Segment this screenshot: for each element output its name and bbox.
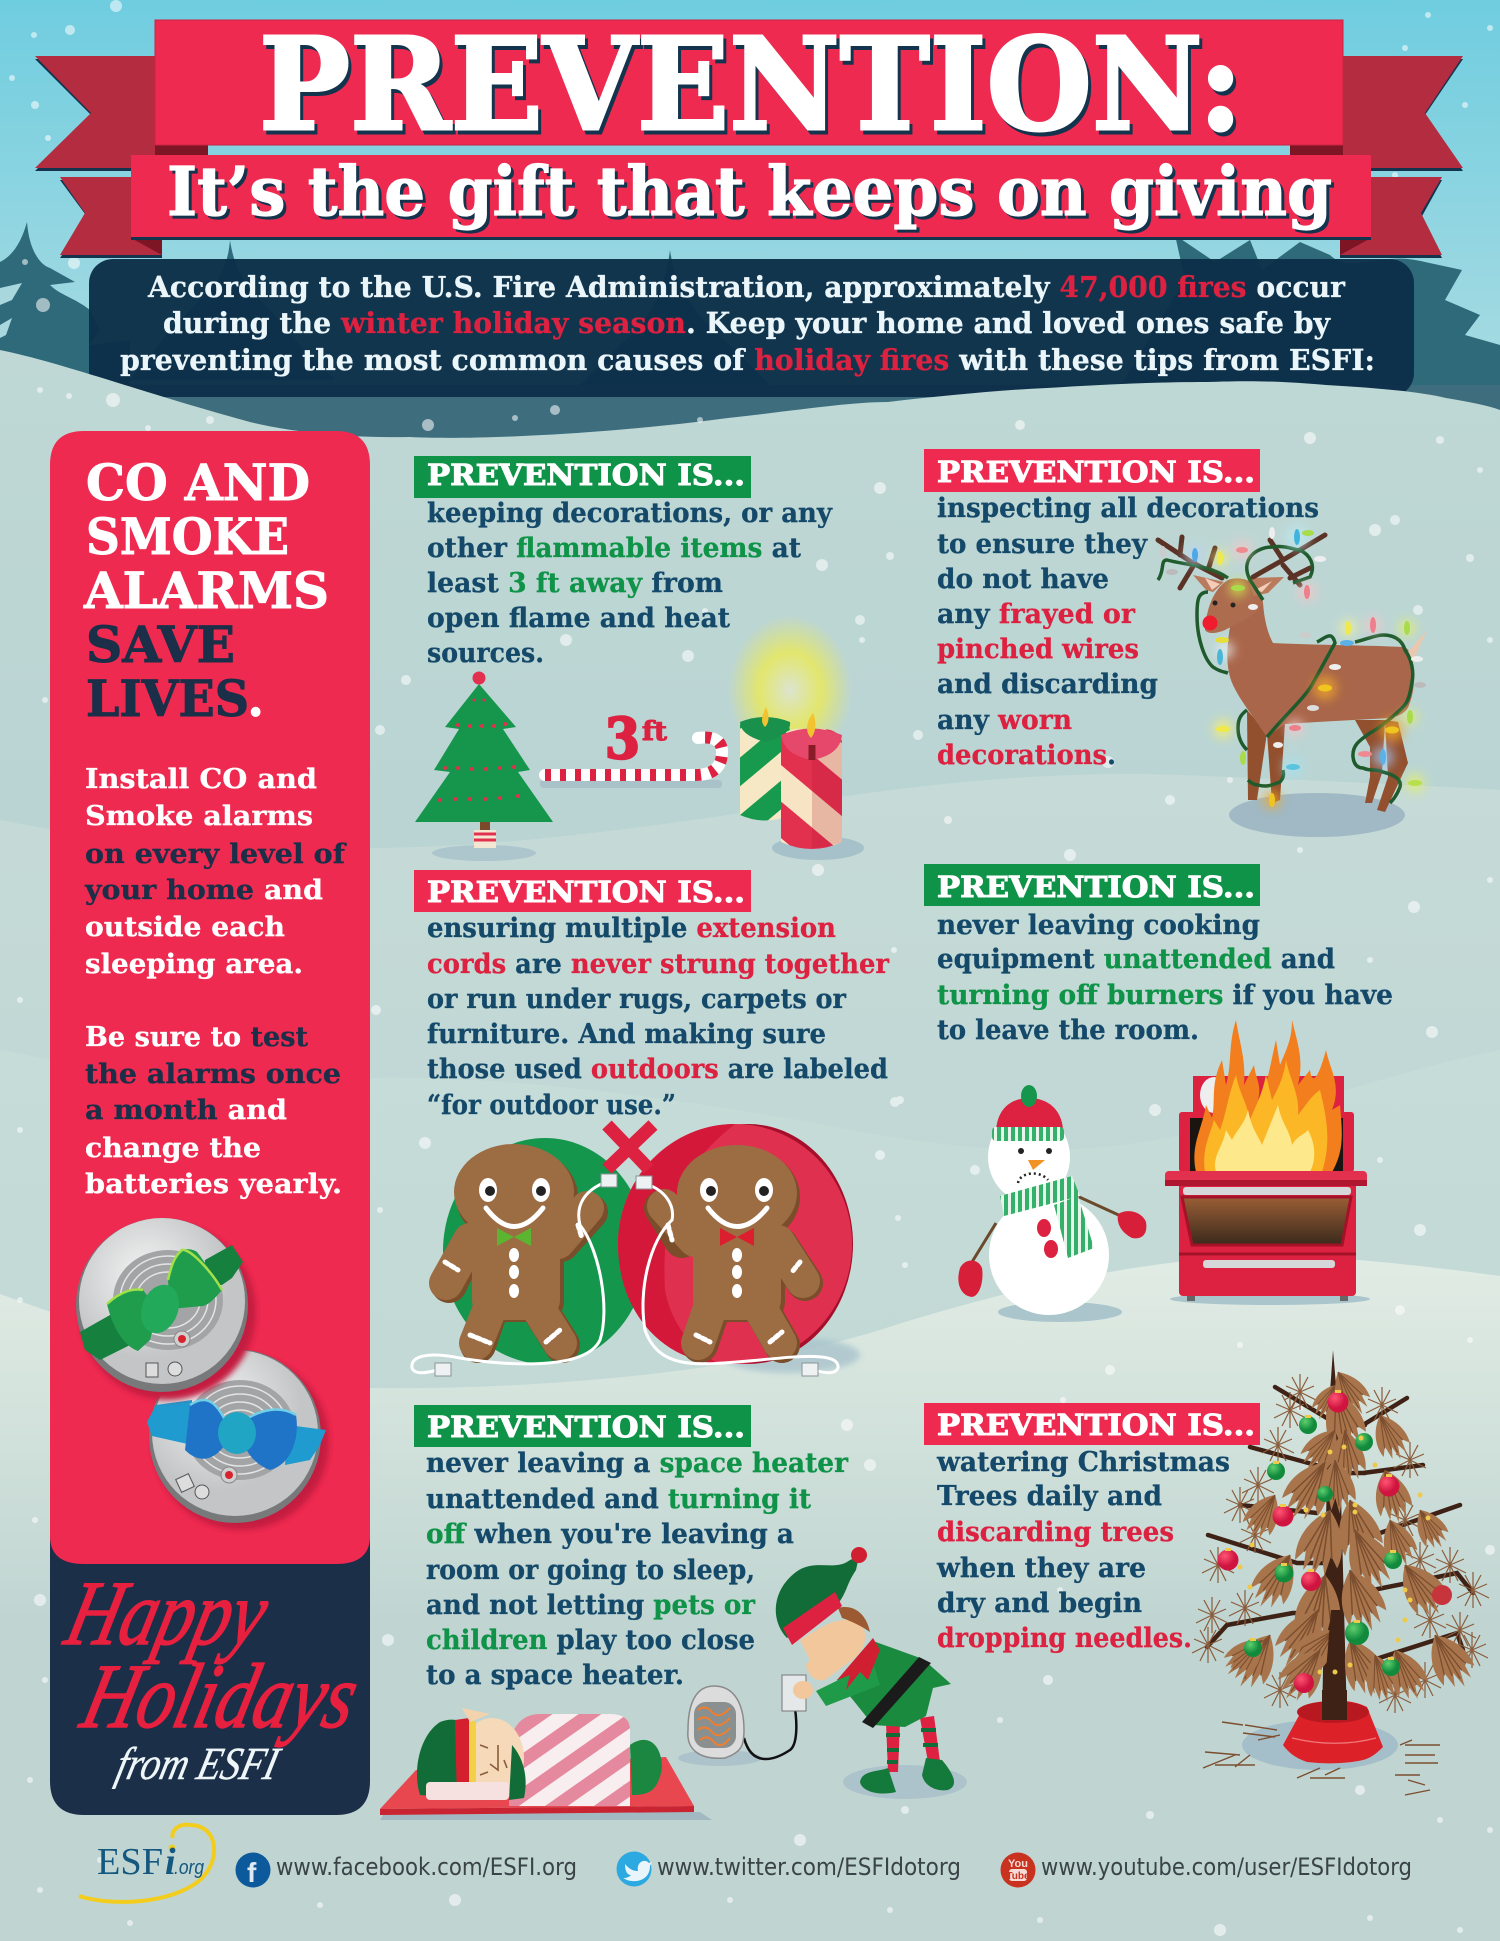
alarm heading xyxy=(83,453,329,728)
tip 2 label: PREVENTION IS... xyxy=(937,455,1255,489)
tip 1 text: keeping decorations, or any xyxy=(427,498,833,529)
tip 1 label: PREVENTION IS... xyxy=(427,458,745,492)
tip 2 text: any frayed or xyxy=(937,599,1136,630)
icon: smoke alarm with green bow xyxy=(76,1218,256,1400)
deer legs xyxy=(1247,710,1408,812)
icon: candy cane 3 ft: 3 xyxy=(605,706,640,772)
tip 5 text xyxy=(426,1448,849,1691)
tip 4 text xyxy=(937,910,1393,1046)
tip 6 text xyxy=(936,1447,1230,1654)
happy holidays greeting: Happy xyxy=(56,1563,279,1665)
gingerbread man left xyxy=(445,1144,590,1345)
tip 1: keep 3 ft away xyxy=(414,456,864,861)
icon: worried snowman xyxy=(958,1085,1146,1322)
alarm heading: LIVES. xyxy=(86,669,264,728)
alarm testing text: Be sure to test xyxy=(85,1022,309,1053)
alarm testing text: change the xyxy=(85,1133,261,1164)
twitter link: www.twitter.com/ESFIdotorg xyxy=(657,1853,961,1881)
alarm install text: outside each xyxy=(85,912,285,943)
youtube link xyxy=(1000,1852,1412,1888)
facebook link xyxy=(236,1852,577,1888)
tip 5 text: children play too close xyxy=(426,1625,755,1656)
intro panel xyxy=(89,259,1414,397)
red x xyxy=(607,1125,653,1169)
alarm install text: Smoke alarms xyxy=(85,801,313,832)
tip 3: extension cords xyxy=(412,870,890,1376)
icon: reindeer tangled in lights xyxy=(1158,525,1427,837)
tip 1 text xyxy=(427,498,833,669)
panel: CO and smoke alarms xyxy=(50,431,370,1815)
ornaments xyxy=(1218,1392,1452,1693)
ornament caps and lights xyxy=(1225,1390,1430,1674)
alarm install text: on every level of xyxy=(85,839,348,870)
sparse needle sprigs xyxy=(1192,1374,1489,1713)
extension cords xyxy=(412,1182,838,1373)
icon: stove on fire xyxy=(1165,1020,1370,1305)
tip 1 text: other flammable items at xyxy=(427,533,802,564)
tip 6 text: dropping needles. xyxy=(937,1623,1192,1654)
alarm testing text: a month and xyxy=(85,1095,287,1126)
tip 3 text: “for outdoor use.” xyxy=(427,1090,676,1121)
tip 3 text: ensuring multiple extension xyxy=(427,913,836,944)
banner: sub ribbon xyxy=(131,155,1371,240)
tip 4 text: never leaving cooking xyxy=(937,910,1260,941)
tip 2 text: decorations. xyxy=(937,740,1116,771)
pot xyxy=(1283,1701,1383,1763)
trunk and branches xyxy=(1322,1350,1347,1720)
alarm install text: sleeping area. xyxy=(85,949,303,980)
tip 2 text: any worn xyxy=(937,705,1072,736)
alarm install text: Install CO and xyxy=(85,764,317,795)
icon: standing elf xyxy=(776,1547,967,1799)
tip 4 text: turning off burners if you have xyxy=(937,980,1393,1011)
tip 2 text xyxy=(937,493,1319,771)
intro text: According to the U.S. Fire Administration, approximately 47,000 fires occur xyxy=(147,270,1346,304)
light cords xyxy=(1158,547,1413,803)
tip 2 text: do not have xyxy=(937,564,1109,595)
tip 1 text: open flame and heat xyxy=(427,603,731,634)
deer head xyxy=(1205,578,1263,633)
tip 2 text: to ensure they xyxy=(937,529,1148,560)
subtitle: It’s the gift that keeps on giving xyxy=(170,155,1335,234)
esfi logo: ESF xyxy=(97,1841,163,1883)
tip 3 text: cords are never strung together xyxy=(427,949,890,980)
youtube link: You xyxy=(1008,1858,1028,1870)
tip 5: space heater xyxy=(380,1405,967,1820)
tip 6 text: discarding trees xyxy=(937,1517,1174,1548)
tip 5 text: room or going to sleep, xyxy=(426,1555,755,1586)
title banner xyxy=(35,10,1463,258)
tip 4 text: to leave the room. xyxy=(937,1015,1199,1046)
intro text: during the winter holiday season. Keep your home and loved ones safe by xyxy=(163,306,1331,340)
banner: main ribbon xyxy=(155,20,1343,145)
alarm heading: ALARMS xyxy=(83,561,329,620)
tip 5 text: unattended and turning it xyxy=(426,1484,812,1515)
tip 2 text: inspecting all decorations xyxy=(937,493,1319,524)
happy holidays greeting: from ESFI xyxy=(111,1739,286,1790)
background: pine trees xyxy=(0,222,1500,460)
subtitle: It’s the gift that keeps on giving xyxy=(167,152,1332,231)
needle clusters xyxy=(1217,1364,1481,1710)
tip 3 label: PREVENTION IS... xyxy=(427,875,745,909)
tip 6: water trees xyxy=(924,1350,1489,1795)
deer body xyxy=(1227,600,1414,737)
alarm heading: SMOKE xyxy=(86,507,289,566)
icon: candy cane 3 ft: ft xyxy=(642,717,667,747)
tip 6 text: when they are xyxy=(936,1553,1146,1584)
alarm testing text: the alarms once xyxy=(85,1059,341,1090)
tip 6 text: dry and begin xyxy=(937,1588,1142,1619)
alarm install text: your home and xyxy=(84,875,323,906)
icon: smoke alarm with blue bow xyxy=(147,1349,329,1530)
tip 6 label: PREVENTION IS... xyxy=(937,1408,1255,1442)
tip 3 text: or run under rugs, carpets or xyxy=(427,984,847,1015)
facebook link: f xyxy=(247,1857,257,1888)
icon: christmas tree xyxy=(415,672,553,861)
intro text xyxy=(120,270,1375,377)
tip 4 text: equipment unattended and xyxy=(937,944,1335,975)
tip 3 text xyxy=(427,913,890,1121)
twitter link xyxy=(616,1852,961,1886)
bulb glows xyxy=(1185,525,1425,809)
tip 4 label: PREVENTION IS... xyxy=(937,870,1255,904)
tip 3 text: those used outdoors are labeled xyxy=(427,1054,888,1085)
esfi logo: .org xyxy=(174,1857,204,1879)
happy holidays greeting: Holidays xyxy=(72,1646,368,1748)
title: PREVENTION: PREVENTION: xyxy=(262,14,1246,163)
tip 6 text: watering Christmas xyxy=(936,1447,1230,1478)
alarm testing text: batteries yearly. xyxy=(85,1169,342,1200)
front trunk xyxy=(1322,1610,1347,1720)
icon: sleeping elf xyxy=(380,1708,712,1820)
icon: space heater and cord xyxy=(678,1675,806,1766)
tip 5 text: and not letting pets or xyxy=(426,1590,756,1621)
facebook link: www.facebook.com/ESFI.org xyxy=(276,1853,577,1881)
icon: gingerbread men with cords xyxy=(412,1124,860,1376)
footer: social links xyxy=(79,1825,1412,1902)
alarm heading: SAVE xyxy=(86,615,235,674)
alarm install text xyxy=(84,764,348,980)
tip 2 text: and discarding xyxy=(937,669,1158,700)
intro text: preventing the most common causes of holiday fires with these tips from ESFI: xyxy=(120,343,1375,377)
tip 1 text: sources. xyxy=(427,638,544,669)
alarm testing text xyxy=(85,1022,342,1200)
tip 5 text: to a space heater. xyxy=(426,1660,684,1691)
title: PREVENTION: PREVENTION: xyxy=(259,10,1243,159)
banner: back ribbon tails xyxy=(35,56,1463,258)
flames xyxy=(1194,1020,1342,1172)
tip 5 text: off when you're leaving a xyxy=(426,1519,794,1550)
tip 2 text: pinched wires xyxy=(937,634,1139,665)
tip 3 text: furniture. And making sure xyxy=(427,1019,826,1050)
bulbs xyxy=(1160,527,1426,807)
icon: candles with glow xyxy=(728,615,864,860)
esfi logo: i xyxy=(165,1841,176,1883)
youtube link: www.youtube.com/user/ESFIdotorg xyxy=(1041,1853,1412,1881)
antlers xyxy=(1158,535,1325,588)
tip 4: cooking equipment xyxy=(924,864,1393,1322)
tip 6 text: Trees daily and xyxy=(937,1481,1162,1512)
fallen needles xyxy=(1203,1722,1440,1795)
panel: holidays footer xyxy=(50,1530,370,1815)
esfi logo xyxy=(79,1825,214,1902)
alarm heading: CO AND xyxy=(86,453,310,512)
youtube link: Tube xyxy=(1006,1871,1030,1882)
tip 2: inspect decorations xyxy=(924,449,1427,837)
tip 5 text: never leaving a space heater xyxy=(426,1448,849,1479)
gingerbread man right xyxy=(662,1145,805,1345)
icon: candy cane 3 ft xyxy=(540,706,722,788)
background: winter sky xyxy=(0,0,1500,460)
tip 5 label: PREVENTION IS... xyxy=(427,1410,745,1444)
icon: dry christmas tree xyxy=(1192,1350,1489,1795)
tip 1 text: least 3 ft away from xyxy=(427,568,723,599)
happy holidays greeting xyxy=(56,1563,368,1790)
